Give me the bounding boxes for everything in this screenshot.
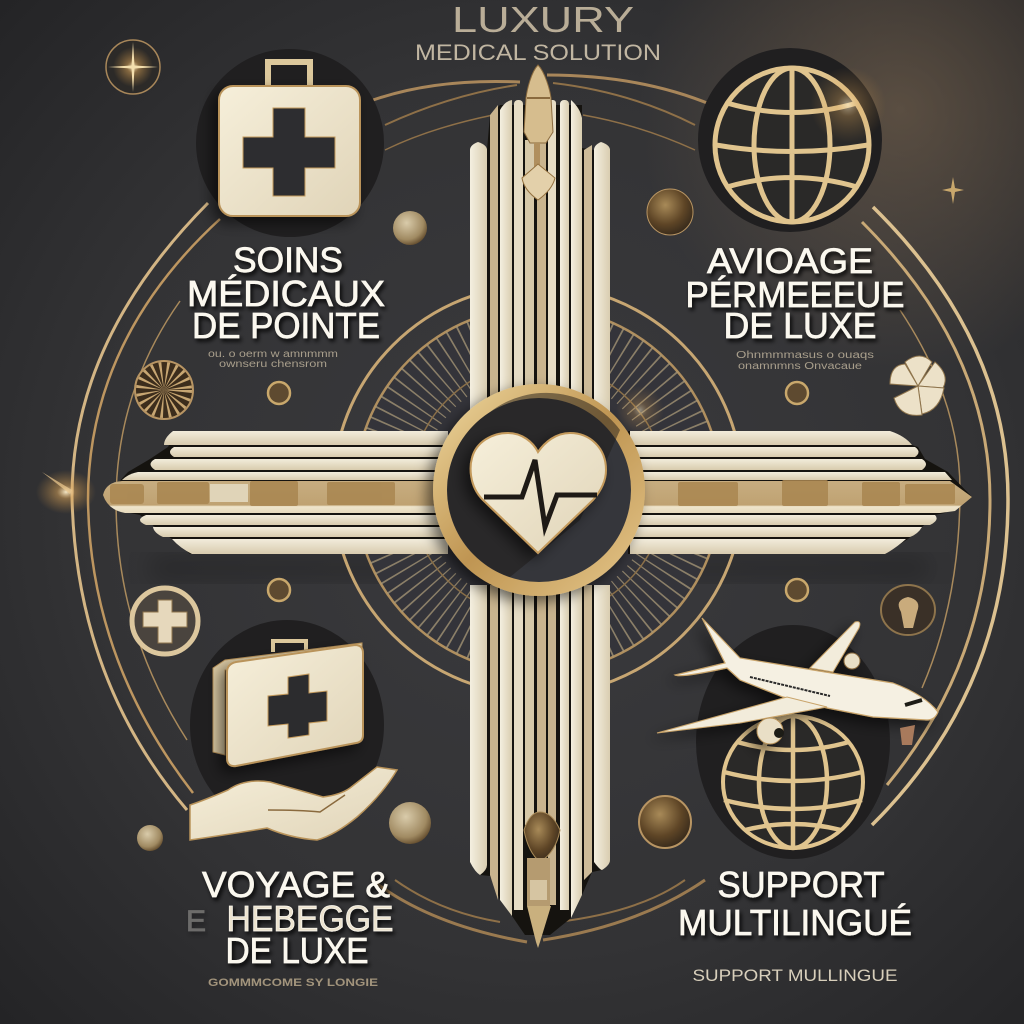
heading: MÉDICAUX [187, 273, 385, 314]
heading: E [186, 905, 206, 938]
heading: SUPPORT [718, 864, 885, 905]
panel: support multilingue [657, 618, 938, 985]
sunburst behind centre [333, 285, 743, 695]
icon: airplane [657, 618, 938, 744]
caption [208, 349, 338, 370]
heading [187, 241, 385, 346]
heart icon [471, 433, 606, 553]
medallion with cross [132, 588, 198, 654]
bottom spire and gem [524, 812, 560, 948]
title: LUXURY [452, 0, 634, 40]
heading: PÉRMEEEUE [686, 274, 904, 315]
panel: voyage et hebergement [186, 620, 397, 989]
flower ornament [890, 356, 945, 415]
heading: DE LUXE [724, 305, 876, 346]
title: MEDICAL SOLUTION [415, 40, 661, 65]
heading: HEBEGGE [226, 898, 394, 939]
panel: soins medicaux [187, 49, 385, 370]
cross: left arm [103, 431, 448, 554]
caption [736, 350, 874, 372]
caption: Ohnmmmasus o ouaqs [736, 350, 874, 361]
icon: kit on hand [190, 620, 397, 840]
cross: bottom arm [470, 585, 610, 935]
icon: globe [696, 625, 890, 859]
icon: medical kit [196, 49, 384, 237]
caption: ownseru chensrom [219, 359, 327, 370]
panel: voyage premium [686, 48, 904, 372]
outer gold rings [72, 75, 1008, 942]
heading: DE POINTE [192, 305, 380, 346]
small medallions [135, 189, 935, 851]
caption: onamnmns Onvacaue [738, 361, 863, 372]
cross: top arm [470, 100, 610, 432]
top spire and gem [522, 65, 555, 200]
heading: DE LUXE [226, 930, 368, 971]
title [415, 0, 661, 65]
cross: right arm [628, 431, 972, 554]
caption: GOMMMCOME SY LONGIE [208, 977, 378, 989]
heading: VOYAGE & [202, 864, 390, 905]
heading [186, 864, 394, 971]
caption: SUPPORT MULLINGUE [692, 966, 898, 985]
caption: ou. o oerm w amnmmm [208, 349, 338, 360]
icon: globe [698, 48, 886, 232]
heading: AVIOAGE [707, 242, 873, 281]
heading [686, 242, 904, 346]
heading: MULTILINGUÉ [678, 902, 912, 943]
airplane body [675, 618, 938, 720]
sparkles [36, 40, 964, 514]
heading [678, 864, 912, 943]
centre medallion with heart [433, 384, 645, 596]
heading: SOINS [233, 241, 343, 280]
